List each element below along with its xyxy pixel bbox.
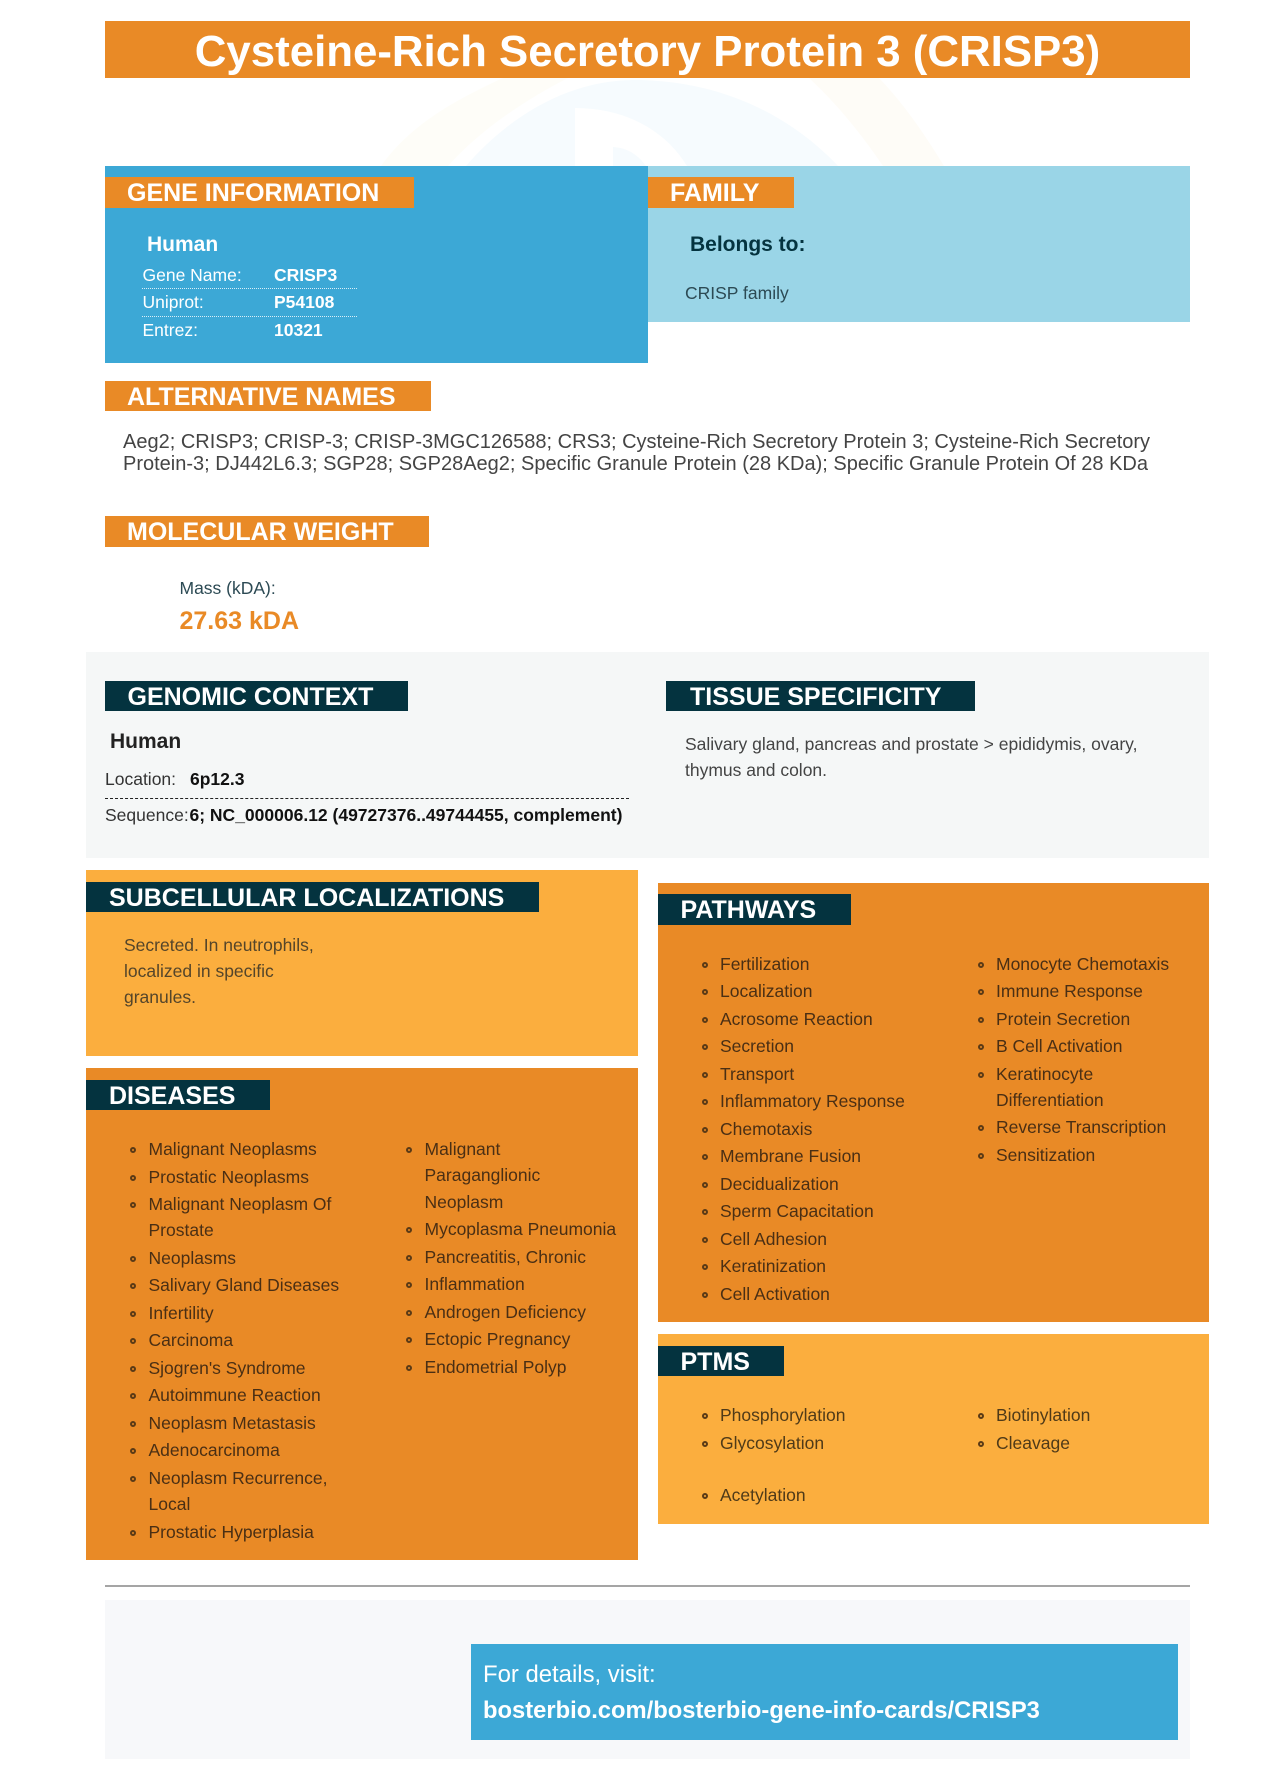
heading: alternative names: ALTERNATIVE NAMES [127,383,396,411]
tissue specificity text: Salivary gland, pancreas and prostate > epididymis, ovary, [685,734,1138,754]
sequence row: 6; NC_000006.12 (49727376..49744455, complement) [190,805,622,825]
text: Salivary Gland Diseases [148,1275,339,1295]
species label: Human [147,233,218,256]
panel: footer [105,1600,1190,1759]
localization text: Secreted. In neutrophils, [124,935,314,955]
text: Cell Adhesion [720,1229,827,1249]
text: Malignant Neoplasms [148,1139,317,1159]
text: Ectopic Pregnancy [424,1329,570,1349]
belongs to label: Belongs to: [690,233,806,256]
watermark logo [466,80,838,166]
text: Endometrial Polyp [424,1357,567,1377]
list: diseases column 2 [406,1139,616,1377]
uniprot row: P54108 [274,292,334,312]
text: Inflammation [424,1274,525,1294]
text: Adenocarcinoma [148,1440,280,1460]
list: ptms column 1 [702,1405,846,1505]
text: B Cell Activation [996,1036,1122,1056]
heading: tissue specificity: TISSUE SPECIFICITY [690,683,941,711]
text: Fertilization [720,954,809,974]
localization text [124,935,314,1007]
heading: diseases: DISEASES [109,1082,235,1110]
text: Neoplasm Recurrence, [148,1468,327,1488]
text: Reverse Transcription [996,1117,1166,1137]
text: Glycosylation [720,1433,824,1453]
panel: ptms [658,1334,1209,1524]
text: Decidualization [720,1174,839,1194]
heading: family: FAMILY [670,179,759,207]
callout label: For details, visit: [483,1661,656,1688]
uniprot row [142,289,357,317]
heading: pathways: PATHWAYS [680,896,816,924]
uniprot row: Uniprot: [142,292,204,312]
entrez row [142,320,323,340]
alternative names text: Aeg2; CRISP3; CRISP-3; CRISP-3MGC126588; CRS3; Cysteine-Rich Secretory Protein 3; Cysteine-Rich Secretory [123,431,1150,453]
heading: genomic context: GENOMIC CONTEXT [128,683,373,711]
text: Protein Secretion [996,1009,1130,1029]
text: Acrosome Reaction [720,1009,873,1029]
text: Secretion [720,1036,794,1056]
text: Cleavage [996,1433,1070,1453]
entrez row: Entrez: [142,320,198,340]
panel: genomic context and tissue specificity [86,652,1209,858]
entrez row: 10321 [274,320,323,340]
text: Inflammatory Response [720,1091,905,1111]
text: Localization [720,981,812,1001]
heading: ptms [658,1346,784,1376]
text: Chemotaxis [720,1119,812,1139]
heading: diseases [86,1080,270,1110]
text: Infertility [148,1303,214,1323]
text: Membrane Fusion [720,1146,861,1166]
gene name row: CRISP3 [274,265,337,285]
list: pathways column 2 [978,954,1169,1165]
alternative names text: Protein-3; DJ442L6.3; SGP28; SGP28Aeg2; Specific Granule Protein (28 KDa); Specific Granule Protein Of 28 KDa [123,453,1148,475]
sequence row: Sequence: [105,805,189,825]
text: Malignant Neoplasm Of [148,1194,331,1214]
list: pathways column 1 [702,954,905,1304]
mass label: Mass (kDA): [180,578,276,598]
heading: ptms: PTMS [680,1348,750,1376]
heading: gene information: GENE INFORMATION [127,179,379,207]
text: Androgen Deficiency [424,1302,586,1322]
text: Immune Response [996,981,1143,1001]
text: Transport [720,1064,794,1084]
text: Pancreatitis, Chronic [424,1247,586,1267]
text: Cell Activation [720,1284,830,1304]
text: Biotinylation [996,1405,1090,1425]
family value: CRISP family [685,283,789,303]
text: Neoplasms [148,1248,236,1268]
text: Sperm Capacitation [720,1201,874,1221]
panel: gene information [105,166,648,363]
location row: Location: [105,769,176,789]
text: Autoimmune Reaction [148,1385,321,1405]
heading: molecular weight: MOLECULAR WEIGHT [127,518,394,546]
gene name row [142,262,357,289]
panel: family [648,166,1190,322]
heading: pathways [658,894,851,925]
location row [105,766,629,799]
tissue specificity text [685,734,1138,780]
panel: diseases [86,1068,638,1560]
title banner: Cysteine-Rich Secretory Protein 3 (CRISP3) [195,27,1100,76]
text: Local [148,1494,190,1514]
panel: subcellular localizations [86,870,638,1056]
mass value: 27.63 kDA [180,607,299,635]
text: Prostatic Neoplasms [148,1167,309,1187]
text: Keratinization [720,1256,826,1276]
text: Differentiation [996,1090,1104,1110]
text: Neoplasm [424,1192,503,1212]
text: Sjogren's Syndrome [148,1358,306,1378]
text: Sensitization [996,1145,1095,1165]
list: diseases column 1 [130,1139,339,1542]
localization text: granules. [124,987,196,1007]
heading: family [648,177,794,208]
callout: details link [471,1644,1178,1740]
tissue specificity text: thymus and colon. [685,760,827,780]
text: Phosphorylation [720,1405,846,1425]
localization text: localized in specific [124,961,274,981]
text: Malignant [424,1139,500,1159]
text: Acetylation [720,1485,806,1505]
gene name row: Gene Name: [142,265,242,285]
text: Carcinoma [148,1330,233,1350]
text: Prostatic Hyperplasia [148,1522,314,1542]
panel: pathways [658,883,1209,1322]
list: ptms column 2 [978,1405,1090,1453]
callout url: bosterbio.com/bosterbio-gene-info-cards/CRISP3 [483,1697,1040,1724]
text: Monocyte Chemotaxis [996,954,1169,974]
text: Mycoplasma Pneumonia [424,1219,616,1239]
species label: Human [110,730,181,753]
text: Keratinocyte [996,1064,1093,1084]
alternative names text [123,431,1150,475]
text: Neoplasm Metastasis [148,1413,316,1433]
text: Paraganglionic [424,1165,540,1185]
location row: 6p12.3 [190,769,244,789]
heading: subcellular localizations: SUBCELLULAR LOCALIZATIONS [109,884,504,912]
text: Prostate [148,1220,214,1240]
